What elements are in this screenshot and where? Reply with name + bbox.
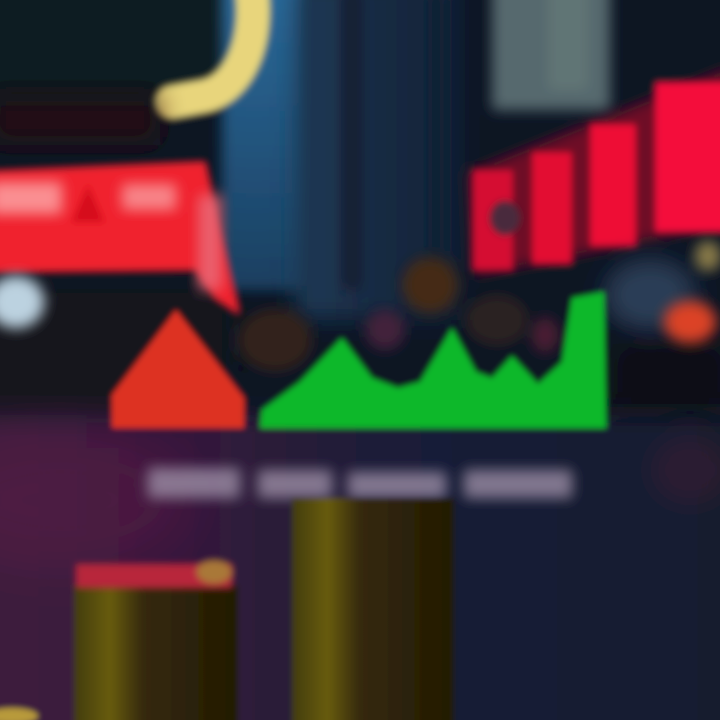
blue sky gap and towers [222,0,610,320]
caption text band (illegible in reference) [148,468,572,498]
candlestick shadows [237,257,559,372]
neon sign: left red [0,95,240,328]
right side lights [604,241,720,343]
neon arc: yellow [172,0,253,102]
neon sign: right red [470,68,720,275]
chart: green area [260,292,606,428]
chart: red triangle [112,310,244,428]
gold cylinder: left [74,560,238,720]
gold cylinder: right [292,498,454,720]
corner coin [0,708,38,720]
